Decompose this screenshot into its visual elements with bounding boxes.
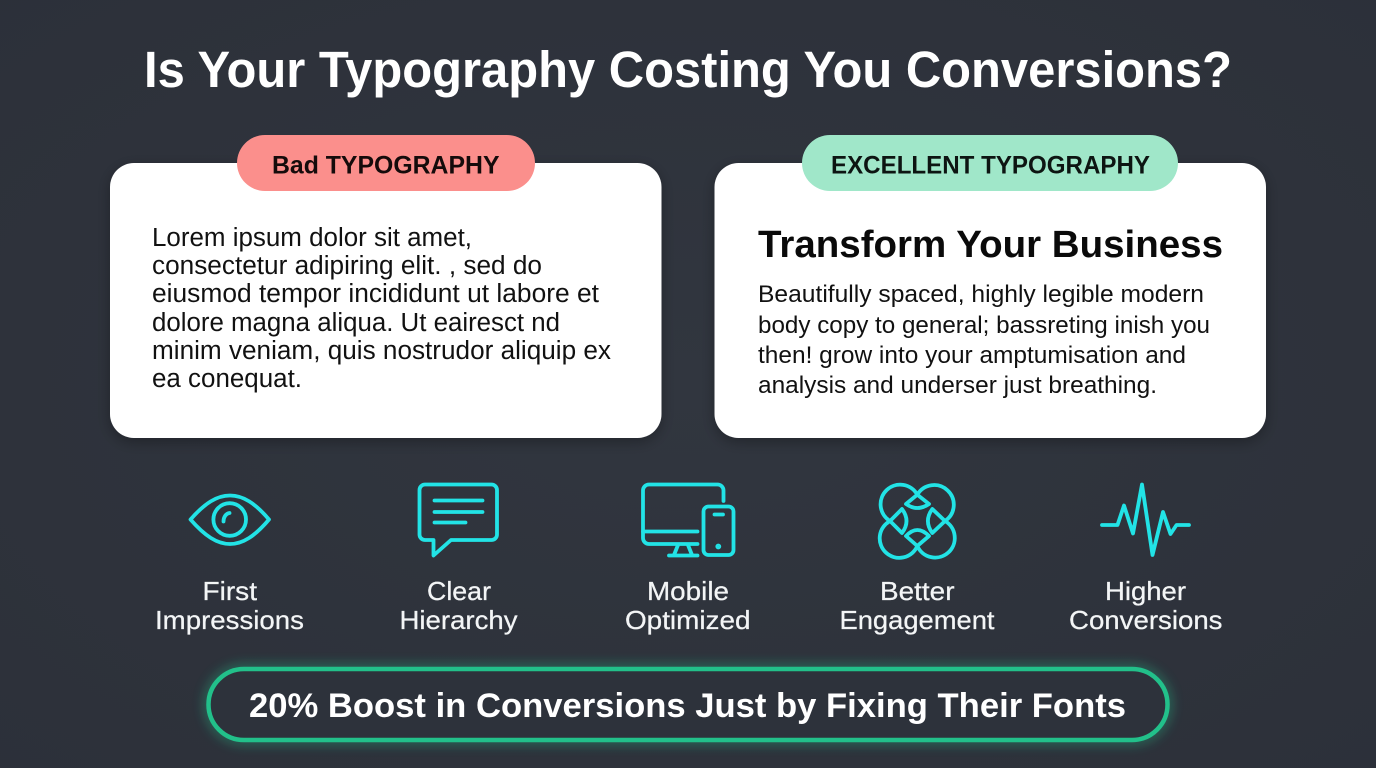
label: higher conversions: Conversions	[1069, 605, 1222, 635]
icon: speech bubble	[420, 484, 497, 556]
label: mobile optimized	[625, 576, 750, 635]
badge: bad typography: Bad TYPOGRAPHY	[272, 152, 500, 180]
icon: eye	[190, 496, 269, 544]
callout: conversion boost: 20% Boost in Conversions Just by Fixing Their Fonts	[249, 687, 1126, 725]
badge: bad typography	[237, 135, 535, 191]
label: clear hierarchy: Clear	[427, 576, 491, 606]
text block: good body copy: then! grow into your amptumisation and	[758, 342, 1186, 369]
card: bad typography	[110, 163, 662, 438]
icon: pulse line	[1102, 484, 1189, 555]
text block: poor body copy: consectetur adipiring elit. , sed do	[152, 252, 542, 280]
label: first impressions	[155, 576, 304, 635]
label: higher conversions	[1069, 576, 1222, 635]
label: first impressions: First	[202, 576, 258, 606]
icon: interlaced knot	[880, 485, 955, 558]
icon: desktop and phone	[643, 484, 734, 556]
text block: good body copy: body copy to general; bassreting inish you	[758, 312, 1210, 339]
feature: mobile optimized	[625, 484, 750, 635]
feature: higher conversions	[1069, 484, 1222, 635]
text block: good body copy: analysis and underser just breathing.	[758, 372, 1157, 399]
text block: good body copy	[758, 281, 1210, 399]
label: first impressions: Impressions	[155, 605, 304, 635]
text block: poor body copy: dolore magna aliqua. Ut eairesct nd	[152, 309, 560, 337]
text block: poor body copy: eiusmod tempor incididunt ut labore et	[152, 280, 599, 308]
label: clear hierarchy	[400, 576, 518, 635]
card: excellent typography	[714, 163, 1266, 438]
text block: poor body copy: Lorem ipsum dolor sit amet,	[152, 224, 472, 252]
label: better engagement: Engagement	[840, 605, 995, 635]
label: clear hierarchy: Hierarchy	[400, 605, 518, 635]
label: mobile optimized: Optimized	[625, 605, 750, 635]
label: better engagement: Better	[880, 576, 955, 606]
label: better engagement	[840, 576, 995, 635]
heading: transform your business: Transform Your Business	[758, 224, 1223, 266]
badge: excellent typography: EXCELLENT TYPOGRAPHY	[831, 152, 1150, 180]
feature: clear hierarchy	[400, 484, 518, 635]
title: Is Your Typography Costing You Conversions?	[144, 41, 1232, 98]
text block: poor body copy: minim veniam, quis nostrudor aliquip ex	[152, 337, 611, 365]
feature: better engagement	[840, 485, 995, 635]
text block: good body copy: Beautifully spaced, highly legible modern	[758, 281, 1204, 308]
text block: poor body copy	[152, 224, 611, 393]
callout: conversion boost	[208, 669, 1168, 740]
feature: first impressions	[155, 496, 304, 635]
badge: excellent typography	[802, 135, 1178, 191]
panel: excellent typography	[714, 135, 1266, 438]
label: mobile optimized: Mobile	[647, 576, 729, 606]
label: higher conversions: Higher	[1105, 576, 1186, 606]
text block: poor body copy: ea conequat.	[152, 365, 302, 393]
panel: bad typography	[110, 135, 662, 438]
